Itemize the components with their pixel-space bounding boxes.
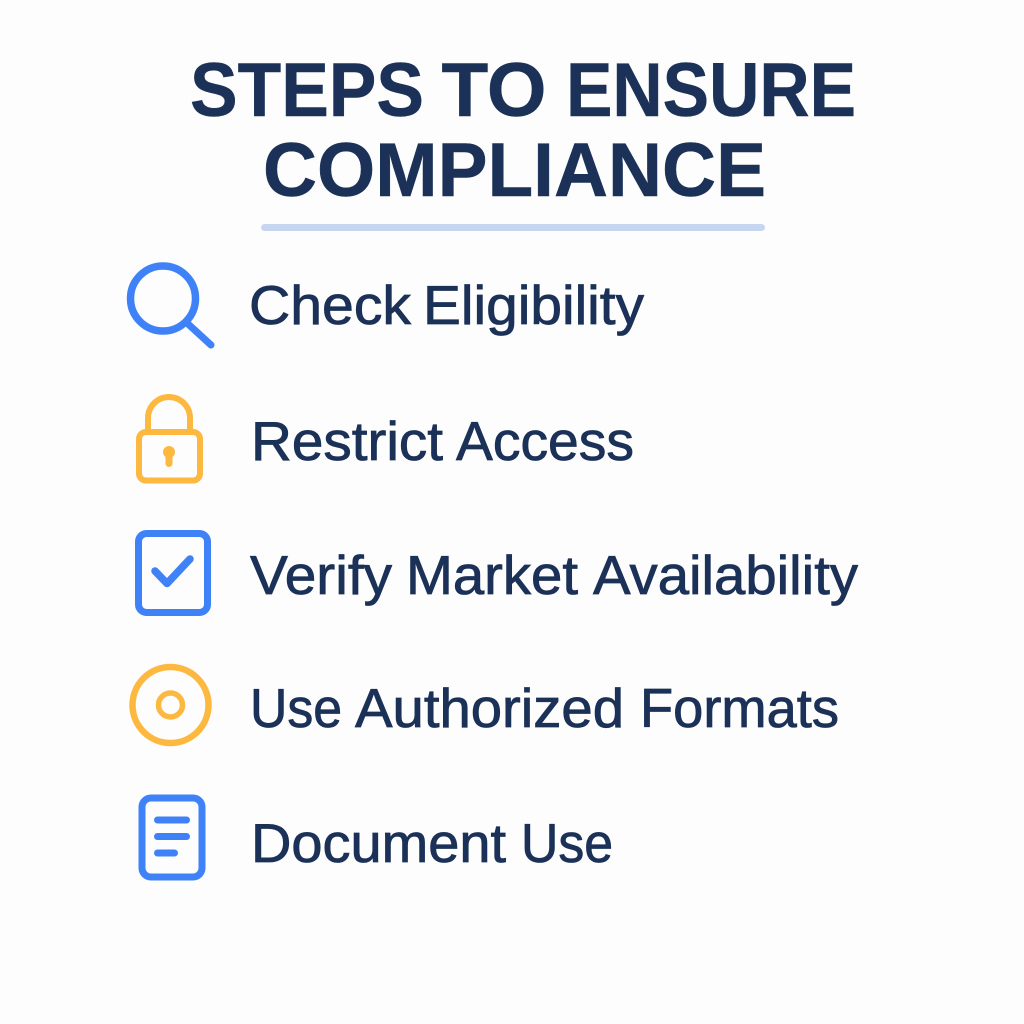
step: Use Authorized Formats: Use xyxy=(250,678,342,739)
title underline xyxy=(261,224,765,231)
step: Document Use: Use xyxy=(521,813,613,874)
icon: padlock xyxy=(139,397,200,480)
step: Verify Market Availability: Availability xyxy=(593,545,859,606)
step: Document Use xyxy=(251,813,613,874)
title: COMPLIANCE xyxy=(263,128,766,213)
step: Use Authorized Formats: Authorized xyxy=(355,678,624,739)
title xyxy=(190,48,856,213)
icon: checkbox xyxy=(138,534,208,612)
icon: target circle xyxy=(132,667,208,743)
title: STEPS xyxy=(190,48,424,133)
step: Use Authorized Formats: Formats xyxy=(640,678,839,739)
step: Verify Market Availability: Market xyxy=(406,545,578,606)
step: Verify Market Availability: Verify xyxy=(250,545,393,606)
step: Restrict Access: Access xyxy=(456,411,634,472)
icon: document xyxy=(142,798,202,877)
icon: magnifying glass xyxy=(130,266,211,345)
step: Use Authorized Formats xyxy=(250,678,839,739)
step: Restrict Access: Restrict xyxy=(251,411,443,472)
step: Restrict Access xyxy=(251,411,634,472)
title: TO xyxy=(442,48,546,133)
step: Check Eligibility xyxy=(249,275,645,336)
title: ENSURE xyxy=(566,48,856,133)
step: Document Use: Document xyxy=(251,813,506,874)
step: Check Eligibility: Check xyxy=(249,275,412,336)
step: Verify Market Availability xyxy=(250,545,859,606)
step: Check Eligibility: Eligibility xyxy=(423,275,645,336)
